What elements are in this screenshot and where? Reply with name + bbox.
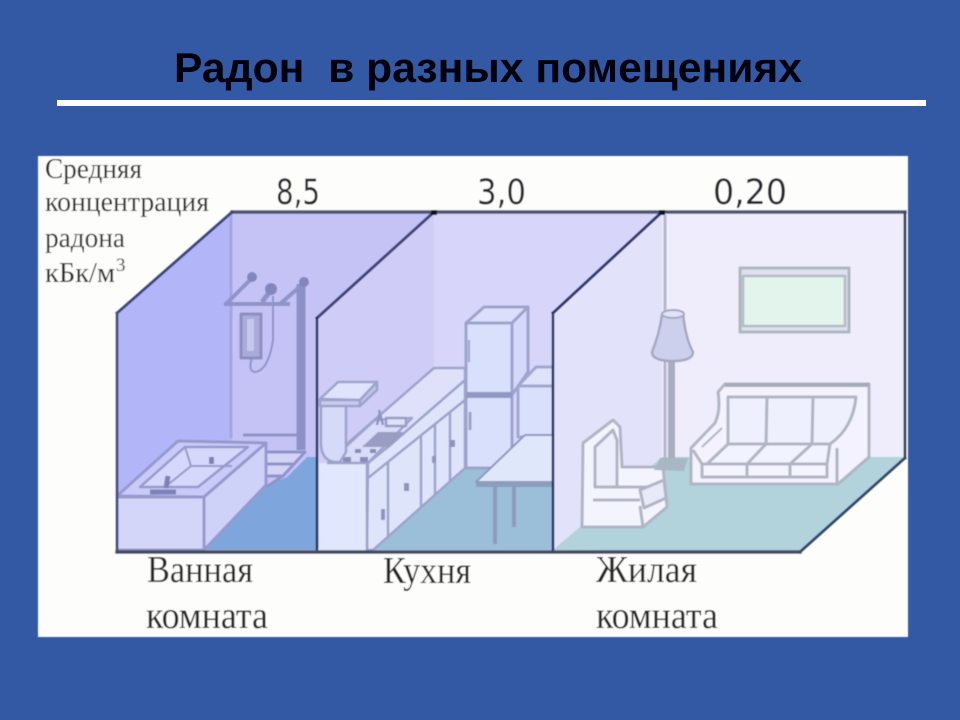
label: average radon concentration: кБк/м [45, 258, 115, 289]
back corner line [664, 215, 666, 460]
title underline [57, 100, 926, 106]
label: average radon concentration: концентрация [45, 187, 209, 218]
value: bathroom 8,5: 8,5 [276, 173, 320, 213]
shower rail [224, 212, 304, 450]
room: bathroom [117, 210, 905, 552]
label: kitchen: Кухня [383, 550, 471, 592]
room outlines [117, 210, 905, 552]
second fridge [518, 367, 553, 437]
kitchen counter [348, 368, 465, 550]
living room floor [553, 457, 905, 552]
living room side wall [553, 212, 662, 552]
stove front [319, 463, 368, 550]
sofa [691, 384, 869, 484]
living room back wall [662, 212, 905, 457]
cabinet knobs [381, 440, 455, 520]
label: bathroom: Ванная [147, 549, 253, 591]
small table [654, 458, 688, 471]
fridge [466, 307, 528, 468]
kitchen back wall [434, 212, 662, 552]
shower knobs [247, 272, 309, 295]
label: average radon concentration [45, 154, 209, 289]
hob [328, 410, 412, 463]
bathtub [117, 441, 266, 550]
label: average radon concentration: Средняя [45, 154, 142, 185]
bathroom back wall [232, 212, 434, 550]
label: living room: Жилая [596, 549, 697, 591]
kitchen floor [373, 468, 553, 550]
picture [740, 268, 849, 332]
floor lamp [652, 310, 693, 460]
armchair [582, 420, 667, 527]
label: bathroom: комната [146, 595, 268, 637]
title: Радон в разных помещениях [174, 44, 803, 91]
bathroom floor [203, 457, 317, 550]
kitchen table [476, 435, 553, 544]
label: living room: комната [596, 595, 718, 637]
water heater [241, 314, 261, 358]
label: average radon concentration: 3 [116, 255, 126, 276]
shower tray [266, 452, 305, 487]
label: bathroom [146, 549, 268, 637]
kitchen side wall [317, 212, 434, 550]
label: living room [596, 549, 718, 637]
extractor hood [320, 382, 377, 462]
label: average radon concentration: радона [45, 223, 126, 254]
bathroom side wall [117, 212, 232, 552]
value: kitchen 3,0: 3,0 [477, 173, 526, 213]
value: living room 0,20: 0,20 [713, 173, 787, 213]
panel: room diagram [38, 154, 908, 637]
